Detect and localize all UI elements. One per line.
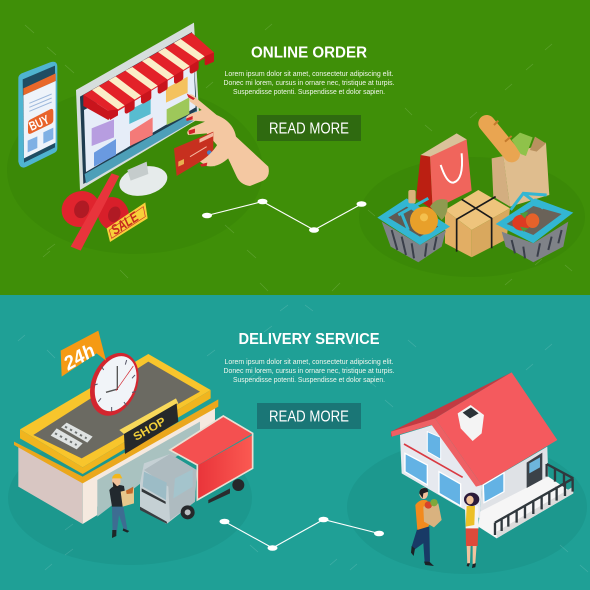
illustration: delivery truck	[140, 416, 253, 524]
icon: smartphone with buy button	[18, 62, 57, 168]
title: online order: ONLINE ORDER	[251, 44, 367, 62]
cardboard box	[445, 190, 510, 257]
icon: shopping bags, box and baskets	[377, 121, 573, 262]
icon: percent sign with sale tag	[56, 173, 148, 251]
right wall	[480, 447, 548, 520]
text block: online order description: Donec mi lorem, cursus in ornare nec, tristique at turpis.	[224, 80, 395, 87]
button: read more	[257, 115, 361, 141]
red shopping bag	[416, 133, 472, 210]
illustration: house	[391, 372, 573, 538]
chimney	[458, 405, 484, 441]
icon: hand holding credit card	[174, 93, 269, 186]
front wall	[400, 425, 482, 518]
icon: percent sign with sale tag: SALE	[108, 208, 142, 238]
button: read more	[257, 403, 361, 429]
right basket	[496, 193, 573, 262]
shop sign	[119, 398, 178, 454]
text block: online order description: Lorem ipsum dolor sit amet, consectetur adipiscing elit.	[224, 71, 394, 78]
left basket	[377, 190, 450, 262]
text block: delivery service description: Lorem ipsum dolor sit amet, consectetur adipiscing elit.	[224, 359, 394, 366]
monitor body	[76, 23, 199, 190]
title: delivery service: DELIVERY SERVICE	[238, 331, 380, 348]
24h tag: 24h	[59, 340, 99, 375]
figure: delivery man carrying groceries	[411, 488, 442, 566]
text block: online order description: Suspendisse potenti. Suspendisse et dolor sapien.	[233, 89, 385, 96]
panel: delivery service	[0, 295, 590, 590]
illustration: shop building	[14, 331, 218, 524]
icon: smartphone with buy button: BUY	[27, 112, 52, 134]
roof	[391, 372, 557, 487]
awning	[83, 33, 214, 120]
panel: online order	[0, 0, 590, 295]
monitor stand	[117, 162, 170, 200]
clock	[81, 346, 148, 423]
paper bag with baguette	[487, 121, 549, 207]
connector line with nodes	[202, 199, 366, 233]
roof vents	[51, 423, 93, 449]
shop sign: SHOP	[131, 415, 169, 444]
porch	[478, 453, 573, 538]
text block: online order description	[224, 71, 395, 96]
figure: woman receiving delivery	[464, 493, 479, 568]
icon: computer monitor with shop awning	[76, 23, 214, 200]
windows	[404, 432, 504, 506]
figure: delivery worker with parcel	[109, 474, 134, 538]
screen	[84, 53, 196, 172]
text block: delivery service description: Donec mi lorem, cursus in ornare nec, tristique at turpis.	[224, 368, 395, 375]
button: read more: READ MORE	[269, 408, 349, 426]
text block: delivery service description: Suspendisse potenti. Suspendisse et dolor sapien.	[233, 377, 385, 384]
connector line with nodes	[220, 517, 384, 551]
text block: delivery service description	[224, 359, 395, 384]
button: read more: READ MORE	[269, 120, 349, 138]
24h tag	[59, 331, 106, 377]
